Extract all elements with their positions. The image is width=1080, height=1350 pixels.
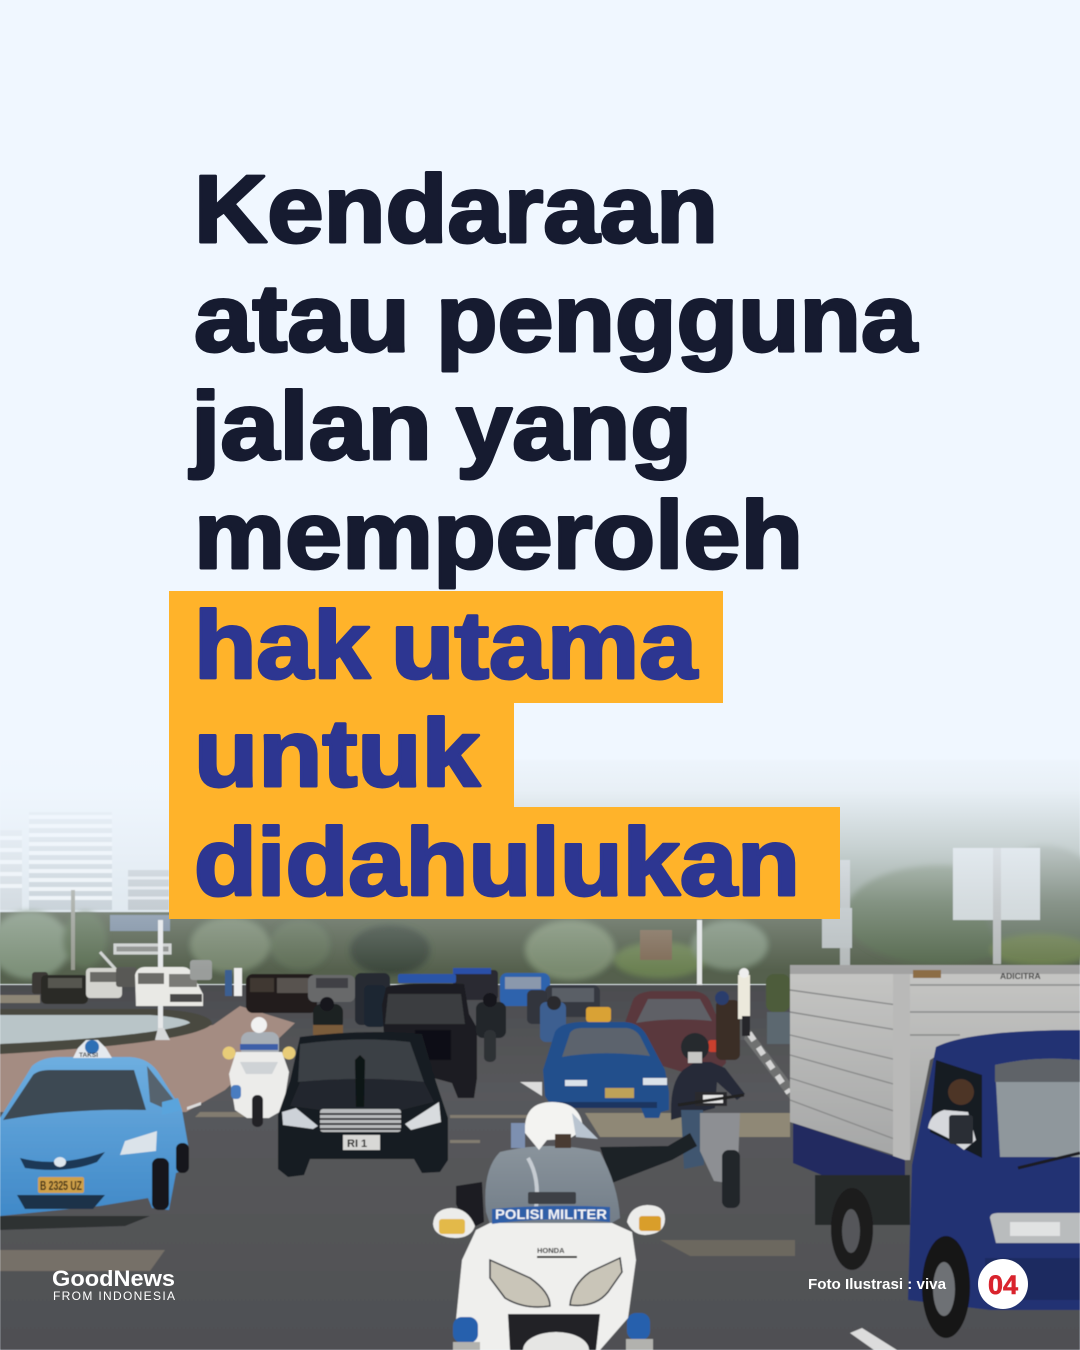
black sedan with flag: RI 1 [347,1138,367,1150]
headline: highlighted blue lines [194,592,800,916]
headline [169,156,918,919]
lane markings [187,1082,897,1350]
page number badge: 04 [988,1270,1018,1300]
fairing [456,1223,636,1350]
blue box truck: ADICITRA [1000,971,1041,981]
headline: dark lines: atau [194,265,410,372]
logo: GoodNews from Indonesia: GoodNews [52,1266,175,1291]
headline: dark lines [189,156,918,589]
headline: dark lines: memperoleh [194,482,803,589]
page number badge [978,1259,1028,1309]
headlights [490,1260,550,1307]
logo: GoodNews from Indonesia [52,1266,175,1303]
logo: GoodNews from Indonesia: FROM INDONESIA [53,1289,175,1303]
distant traffic [32,960,600,1027]
mirrors [433,1208,475,1238]
highlight: yellow block [169,591,840,919]
headline: dark lines: Kendaraan [194,156,718,263]
blue Blue Bird taxi [0,1040,189,1230]
escort motorbikes behind [313,990,566,1062]
rider arm and glove [600,1133,697,1183]
fog fade over photo [0,745,1080,970]
pedestrians and planter [738,968,790,1044]
white police motorbike [222,1017,296,1127]
black SUV with blue lights [382,974,477,1098]
blue box truck [790,965,1080,1338]
blue beacons [453,1317,478,1343]
headline: highlighted blue lines: untuk [194,700,481,807]
helmet [525,1102,583,1150]
background: trees and signs [0,845,1080,992]
headline: highlighted blue lines: hak [194,592,371,699]
black sedan with flag [278,1032,450,1177]
lower fairing [508,1314,600,1350]
headline: dark lines: yang [456,373,692,480]
photo credit: Foto Ilustrasi : viva [808,1276,947,1293]
background: skyline [0,760,1080,960]
blue Blue Bird taxi: B 2325 UZ [40,1178,82,1193]
photo: motorcade on a Jakarta road [0,760,1080,1350]
motorcyclist with mask [671,991,745,1208]
pavement and fountain pond [0,920,795,1271]
blue Blue Bird taxi: TAKSI [79,1052,98,1059]
red car [619,991,726,1073]
headline: highlighted blue lines: didahulukan [194,809,800,916]
lead Polisi Militer motorbike: HONDA [537,1246,565,1255]
headline: dark lines: pengguna [436,265,918,372]
road surface [0,985,1080,1350]
headline: highlighted blue lines: utama [391,592,698,699]
blue Hyundai taxi [543,1007,669,1118]
lead Polisi Militer motorbike [433,1102,697,1350]
lead Polisi Militer motorbike: POLISI MILITER [495,1207,607,1222]
headline: dark lines: jalan [189,373,432,480]
police windshield [485,1146,620,1224]
